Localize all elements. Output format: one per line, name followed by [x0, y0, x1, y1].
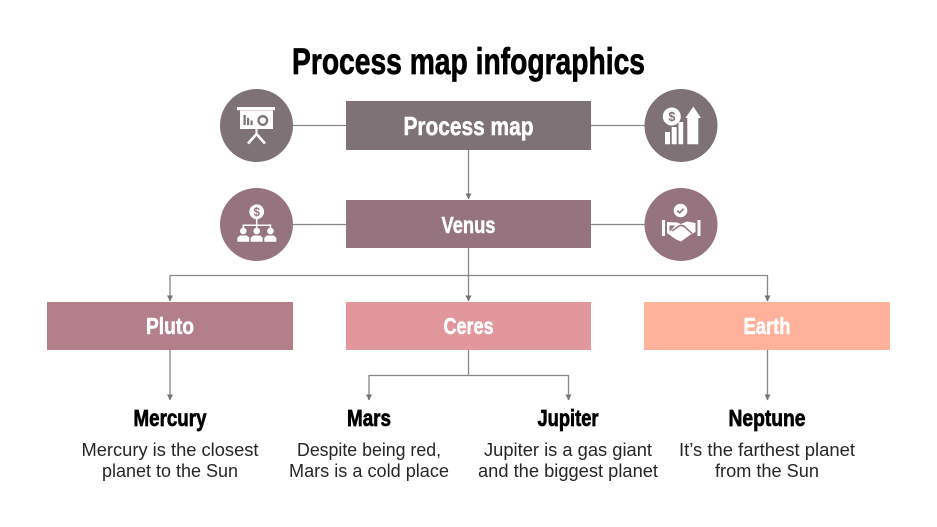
column: Mercury: Mercury [134, 405, 207, 431]
icon: handshake with check [644, 188, 718, 261]
column: Jupiter: Jupiter is a gas giant [484, 440, 652, 460]
box: Ceres [346, 302, 591, 350]
column: Jupiter: and the biggest planet [478, 461, 658, 481]
column: Mercury [82, 405, 258, 481]
column: Mercury: planet to the Sun [102, 461, 238, 481]
column: Mars [289, 405, 449, 481]
box: Ceres: Ceres [444, 313, 494, 339]
box: Venus [346, 200, 591, 248]
column: Mercury: Mercury is the closest [82, 440, 258, 460]
box: Pluto: Pluto [146, 313, 194, 339]
icon: org chart with dollar: $ [253, 207, 260, 219]
column: Neptune [679, 405, 855, 481]
column: Jupiter [478, 405, 658, 481]
title: Process map infographics [292, 41, 645, 82]
column: Jupiter: Jupiter [538, 405, 599, 431]
column: Neptune: It’s the farthest planet [679, 440, 855, 460]
column: Mars: Despite being red, [297, 440, 441, 460]
icon: rising chart with dollar: $ [668, 110, 675, 124]
connector lines [170, 126, 768, 400]
icon: rising chart with dollar [644, 89, 718, 162]
column: Mars: Mars is a cold place [289, 461, 449, 481]
column: Neptune: Neptune [728, 405, 806, 431]
box: Earth: Earth [744, 313, 790, 339]
box: Earth [644, 302, 890, 350]
box: Venus: Venus [442, 212, 496, 238]
column: Mars: Mars [347, 405, 391, 431]
column: Neptune: from the Sun [715, 461, 819, 481]
icon: presentation board [220, 89, 293, 162]
icon: org chart with dollar [220, 188, 293, 261]
box: Process map: Process map [404, 111, 534, 141]
box: Process map [346, 101, 591, 150]
box: Pluto [47, 302, 293, 350]
